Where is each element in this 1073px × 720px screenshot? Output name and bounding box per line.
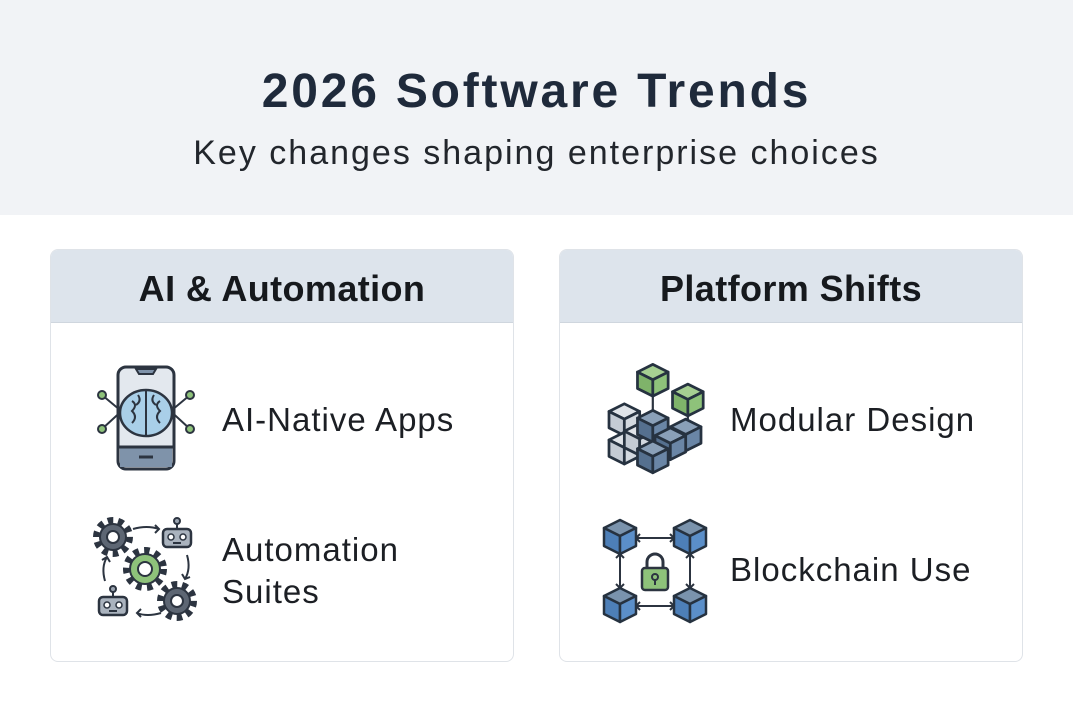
icon: blockchain cubes with lock: [602, 518, 708, 624]
text: AI-Native Apps: AI-Native Apps: [222, 401, 454, 438]
text: Automation Suites: Automation: [222, 531, 399, 568]
panel heading: AI & Automation: AI & Automation: [139, 268, 425, 309]
panel: Platform Shifts: [559, 249, 1023, 662]
header band: [0, 0, 1073, 215]
subtitle: Key changes shaping enterprise choices: [193, 134, 880, 172]
text: Modular Design: Modular Design: [730, 401, 975, 438]
text: Automation Suites: Suites: [222, 573, 320, 610]
panel heading: Platform Shifts: Platform Shifts: [660, 268, 922, 309]
text: Automation Suites: [222, 531, 399, 610]
icon: modular cubes: [608, 363, 705, 474]
title: 2026 Software Trends: [262, 65, 811, 118]
panel: AI & Automation: [50, 249, 514, 662]
icon: AI phone brain: [97, 366, 195, 470]
icon: automation gears and robots: [93, 517, 197, 621]
text: Blockchain Use: Blockchain Use: [730, 551, 971, 588]
panel heading: Platform Shifts: [560, 250, 1022, 323]
panel heading: AI & Automation: [51, 250, 513, 323]
